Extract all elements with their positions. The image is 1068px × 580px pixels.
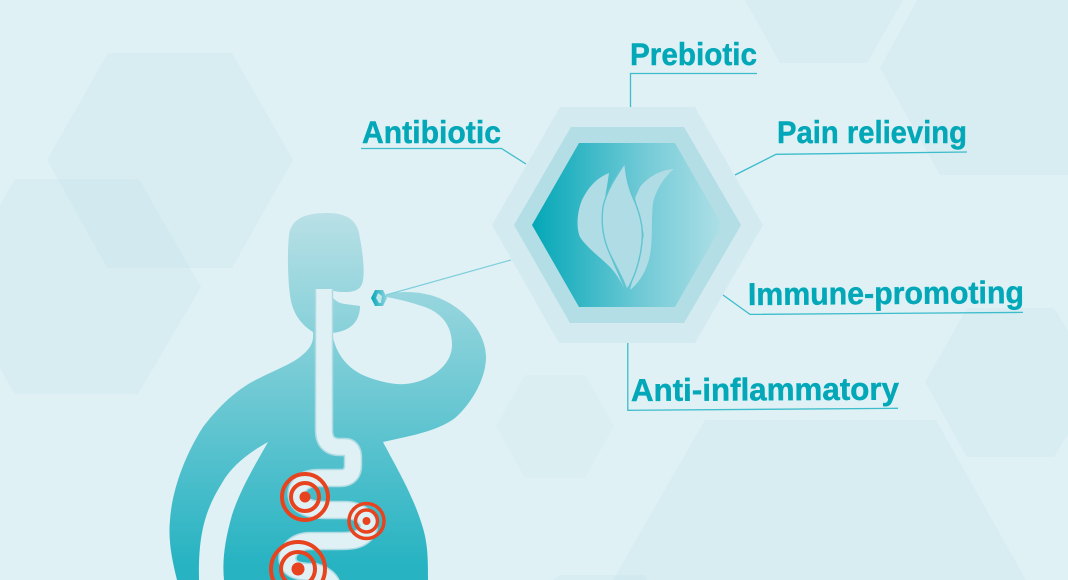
label: Pain relieving: [735, 114, 967, 175]
icon: large hexagon with leaves: [492, 107, 763, 343]
pain target 2: [349, 504, 384, 538]
label text: Antibiotic: [362, 114, 501, 150]
icon: small capsule hexagon: [371, 290, 387, 306]
leader line: [361, 148, 526, 164]
label: Prebiotic: [630, 36, 757, 107]
inner hexagon: [532, 143, 722, 307]
label text: Prebiotic: [630, 36, 757, 72]
label text: Anti-inflammatory: [631, 371, 899, 408]
label: Immune-promoting: [723, 274, 1024, 314]
leader line: [630, 74, 757, 107]
digestive tract: [287, 289, 369, 580]
pain target 1: [282, 474, 328, 520]
leader line: [735, 152, 967, 175]
person silhouette with digestive tract: [169, 213, 486, 580]
pain target 3: [271, 542, 325, 580]
pointer line from capsule to hexagon: [386, 260, 511, 295]
outer hexagon: [492, 107, 763, 343]
middle hexagon: [514, 127, 741, 323]
leader line: [628, 343, 898, 410]
label: Antibiotic: [361, 114, 526, 164]
body silhouette: [169, 213, 486, 580]
label text: Pain relieving: [777, 114, 967, 150]
label: Anti-inflammatory: [628, 343, 899, 410]
leaves: [578, 163, 674, 290]
label text: Immune-promoting: [748, 274, 1024, 312]
leader line: [723, 295, 1023, 314]
